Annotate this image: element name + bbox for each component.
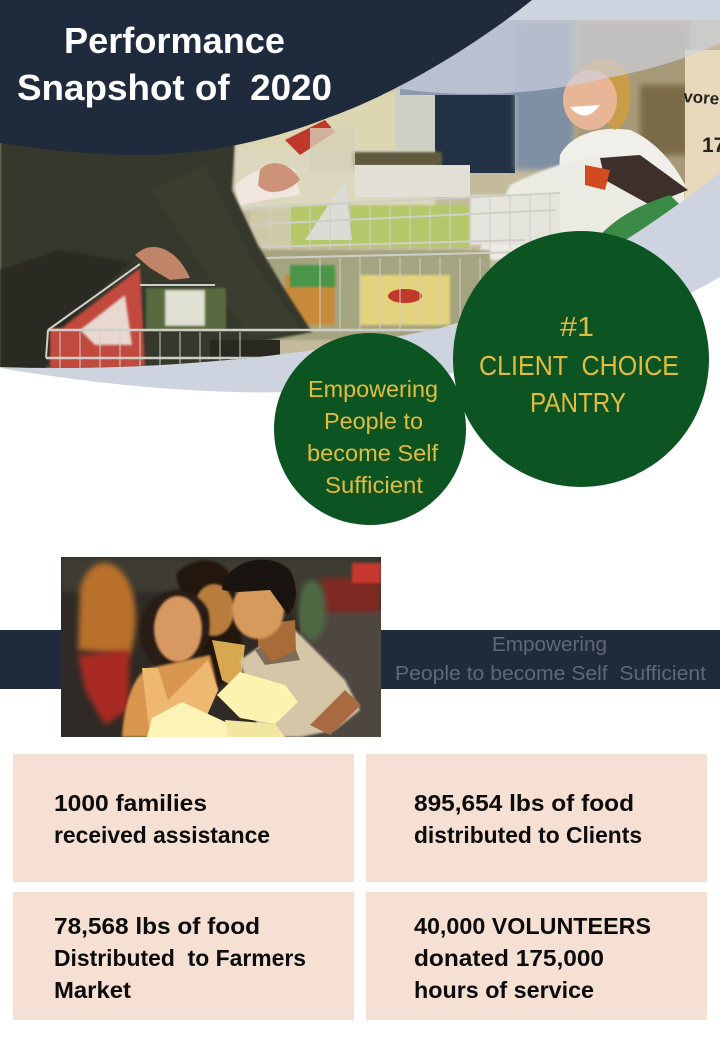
man hand <box>135 247 190 280</box>
stat: families: received assistance <box>54 822 270 848</box>
store background <box>0 20 720 370</box>
hand and sleeve <box>235 166 300 205</box>
stat: volunteers: hours of service <box>414 977 594 1003</box>
band text: People to become Self Sufficient <box>395 663 706 685</box>
man in olive jacket <box>0 135 312 370</box>
food boxes <box>147 702 232 737</box>
right child <box>240 625 360 737</box>
left child <box>140 590 210 672</box>
circle: empowering <box>274 333 466 525</box>
circle: client choice: CLIENT CHOICE <box>479 350 679 381</box>
band text: Empowering <box>492 634 607 656</box>
sign <box>685 50 720 200</box>
stat: volunteers: 40,000 VOLUNTEERS <box>414 913 651 939</box>
stat: farmers market: Distributed to Farmers <box>54 945 306 971</box>
circle: empowering: Sufficient <box>325 472 424 498</box>
band text <box>395 634 706 685</box>
stat: food to clients <box>366 754 707 882</box>
dark title shape <box>0 0 532 155</box>
translucent overlay on photo top <box>395 0 720 94</box>
back cart wires <box>240 193 560 330</box>
photo: shopping cart and smiling shopper <box>0 20 720 370</box>
title: Snapshot of 2020 <box>17 67 332 108</box>
plastic bag <box>305 180 352 240</box>
title <box>17 20 332 108</box>
blurred boy in background <box>78 563 136 655</box>
green cart panel <box>290 205 470 247</box>
title: Performance <box>64 20 285 61</box>
stat: volunteers: donated 175,000 <box>414 945 604 971</box>
front of cart with red panel <box>46 264 460 368</box>
stat: food to clients: 895,654 lbs of food <box>414 790 634 816</box>
photo: children with food boxes <box>61 557 381 737</box>
background swoosh <box>0 0 720 392</box>
dark band <box>0 630 720 689</box>
middle child <box>176 561 245 690</box>
stat: farmers market: 78,568 lbs of food <box>54 913 260 939</box>
circle: client choice: PANTRY <box>530 387 626 418</box>
stat: farmers market: Market <box>54 977 131 1003</box>
top strip <box>505 0 720 20</box>
circle: client choice: #1 <box>560 311 594 342</box>
circle: client choice <box>453 231 709 487</box>
stat: farmers market <box>13 892 354 1020</box>
circle: empowering: become Self <box>307 440 439 466</box>
circle: empowering: Empowering <box>308 376 438 402</box>
stat: families: 1000 families <box>54 790 207 816</box>
stat: families <box>13 754 354 882</box>
groceries in cart <box>261 248 492 340</box>
woman <box>559 60 685 203</box>
circle: empowering: People to <box>324 408 423 434</box>
stat: food to clients: distributed to Clients <box>414 822 642 848</box>
bags <box>479 164 687 262</box>
stat: volunteers <box>366 892 707 1020</box>
